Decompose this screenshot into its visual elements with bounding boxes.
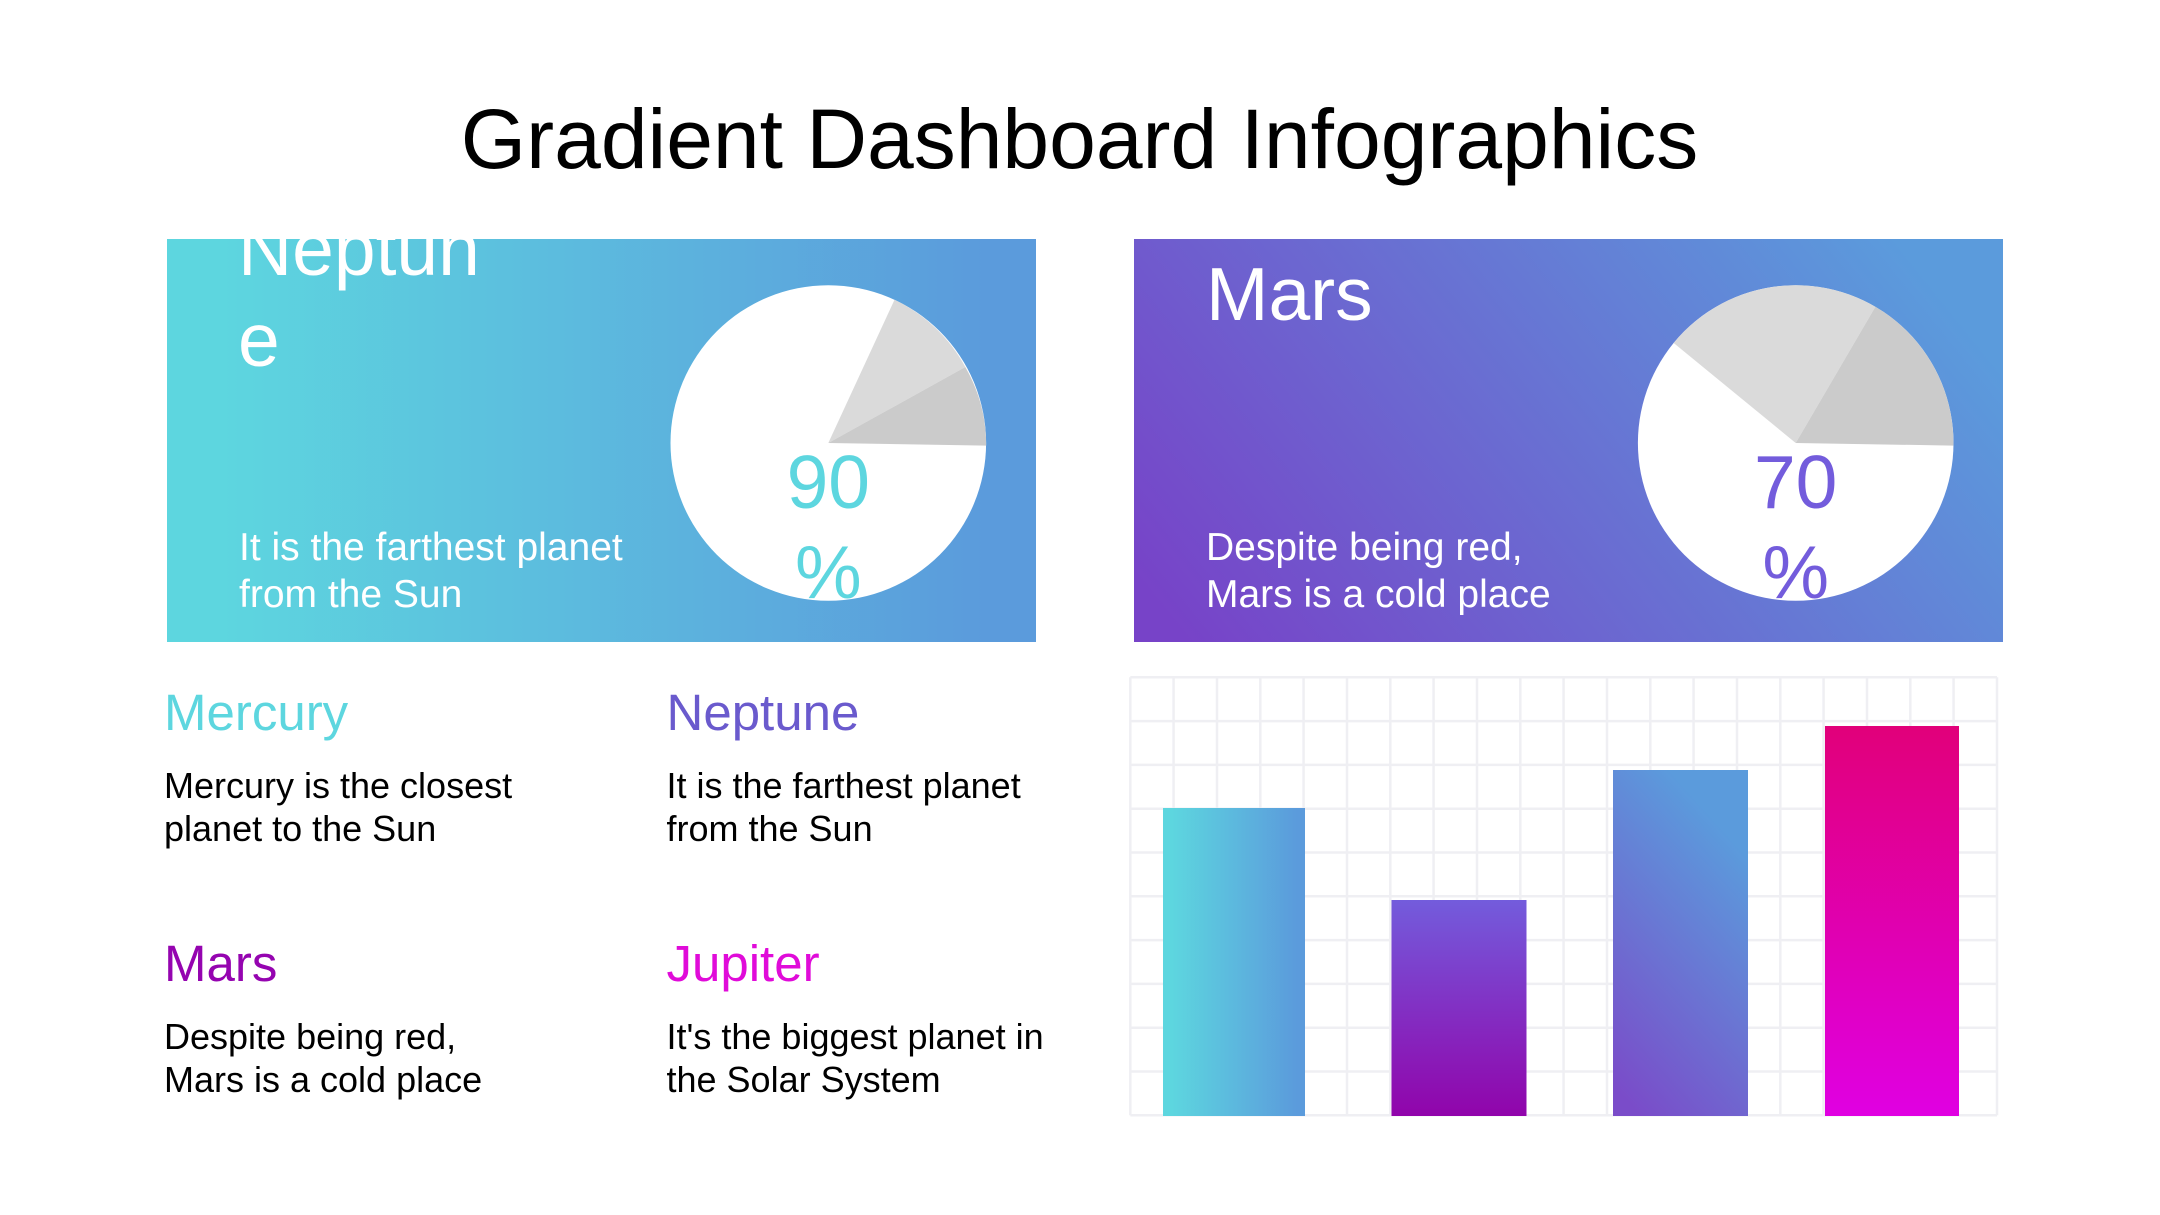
text block: Jupiter: Jupiter — [666, 935, 820, 992]
text block: Jupiter: the Solar System — [666, 1059, 941, 1100]
bar 1 — [1163, 808, 1305, 1116]
text block: Neptune: Neptune — [666, 684, 859, 741]
value: 90% — [790, 455, 867, 598]
value: 90%: % — [795, 530, 862, 614]
text block: Jupiter: It's the biggest planet in — [666, 1016, 1044, 1057]
text: Neptune description: from the Sun — [239, 573, 462, 616]
text: Neptune description: It is the farthest planet — [239, 526, 623, 569]
text: Mars description — [1206, 526, 1551, 616]
value: 90%: 90 — [787, 440, 870, 524]
bar chart — [1130, 677, 1997, 1116]
text: Mars description: Despite being red, — [1206, 526, 1523, 569]
text block: Neptune: from the Sun — [666, 808, 873, 849]
bar 2 — [1392, 900, 1526, 1116]
text block: Mars: Mars is a cold place — [164, 1059, 482, 1100]
text block: Neptune: It is the farthest planet — [666, 765, 1021, 806]
text block: Mars — [164, 935, 482, 1100]
panel: Neptune card — [167, 207, 1036, 642]
bar 3 — [1613, 770, 1748, 1116]
text block: Neptune — [666, 684, 1021, 849]
text block: Mars: Mars — [164, 935, 277, 992]
text: Neptune description — [239, 526, 623, 616]
panel: Mars card — [1134, 239, 2003, 642]
heading: Neptune: e — [238, 298, 280, 382]
heading: Neptune: Neptun — [238, 207, 480, 291]
title: Gradient Dashboard Infographics — [461, 92, 1698, 186]
pie chart: Neptune 90% — [670, 285, 986, 614]
heading: Neptune — [241, 239, 475, 366]
value: 70% — [1758, 455, 1834, 598]
text block: Mercury: Mercury — [164, 684, 349, 741]
heading: Mars: Mars — [1206, 252, 1373, 336]
pie chart: Mars 70% — [1638, 285, 1953, 614]
bar 4 — [1825, 726, 1959, 1116]
text block: Mars: Despite being red, — [164, 1016, 456, 1057]
text block: Mercury: Mercury is the closest — [164, 765, 512, 806]
value: 70%: % — [1762, 530, 1829, 614]
text block: Jupiter — [666, 935, 1044, 1100]
text block: Mercury — [164, 684, 512, 849]
text block: Mercury: planet to the Sun — [164, 808, 436, 849]
text: Mars description: Mars is a cold place — [1206, 573, 1551, 616]
value: 70%: 70 — [1754, 440, 1837, 524]
